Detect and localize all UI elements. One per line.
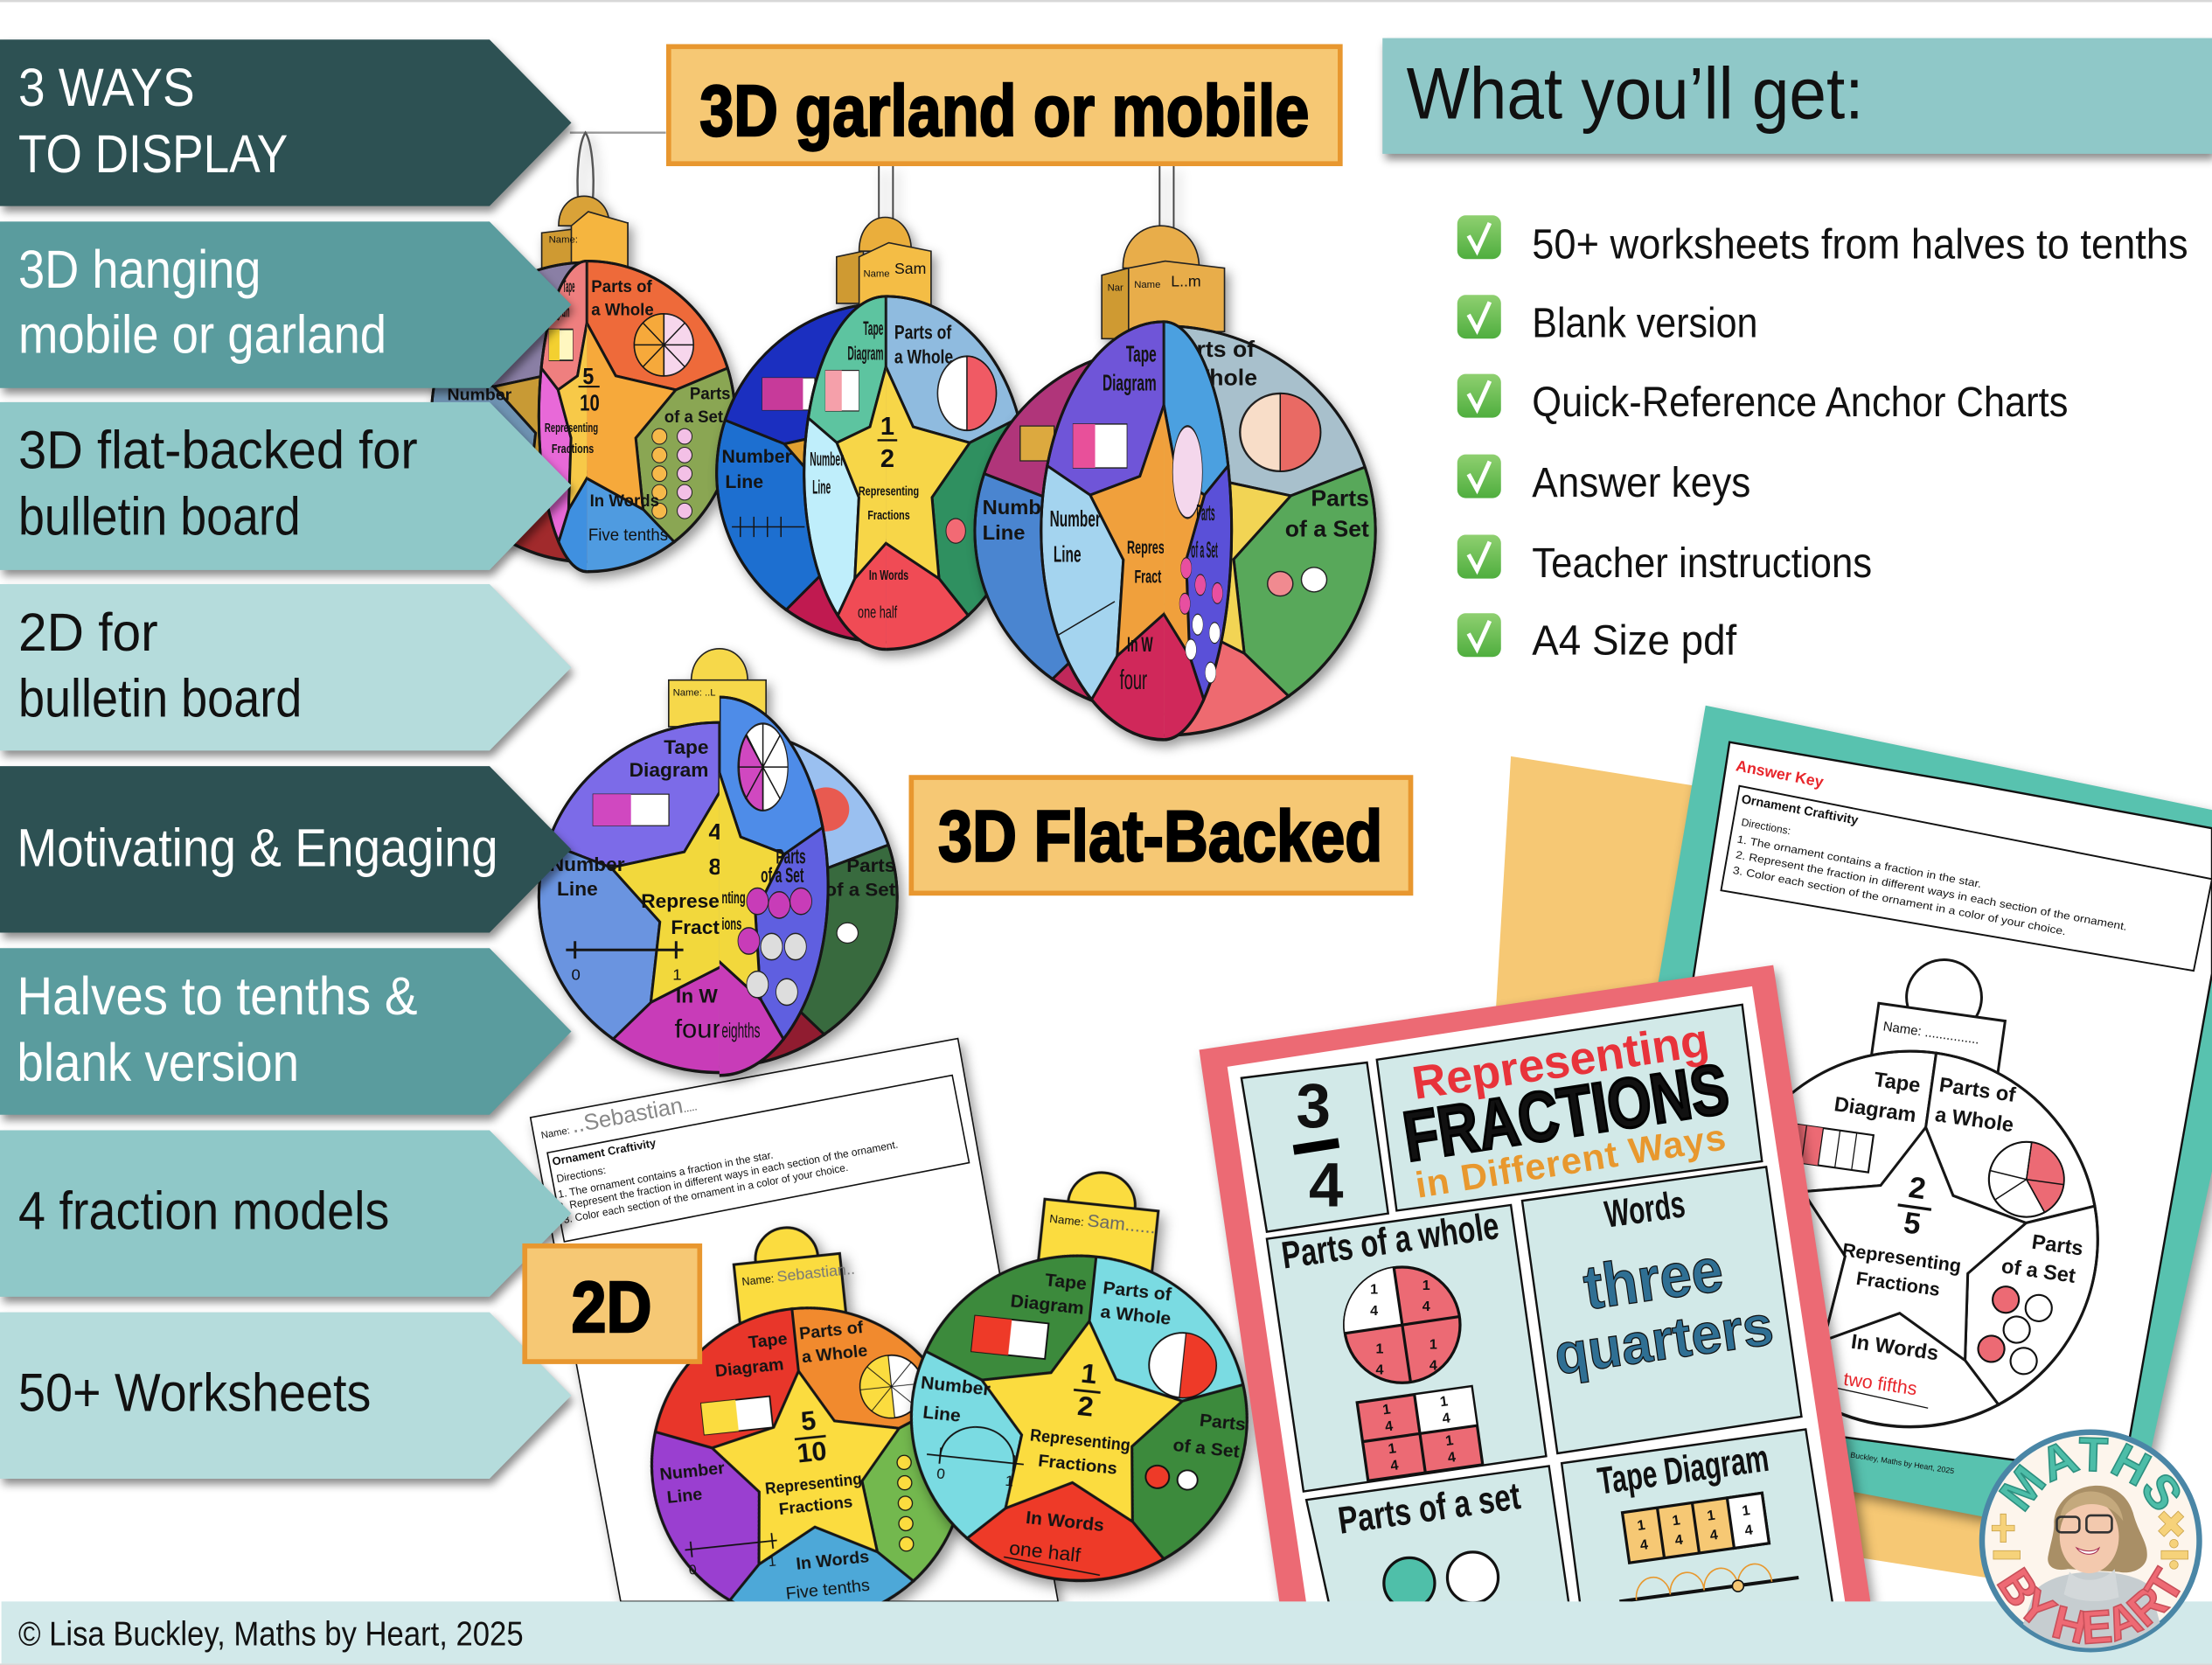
answer key ornament: Diagram <box>1833 1093 1917 1127</box>
star fraction text: one half: 2 <box>880 445 894 473</box>
flat-backed 3D ornament: four eighths: Fract <box>671 917 720 938</box>
hanging 3D ornament: one half: Tape <box>863 317 884 339</box>
star fraction text: one half: In Words <box>869 568 908 583</box>
arrow: halves to tenths and blank version: blank version <box>17 1032 299 1092</box>
arrow: motivating and engaging <box>0 766 571 933</box>
arrow: 50+ worksheets: 50+ Worksheets <box>18 1362 371 1423</box>
hanging 3D ornament: five tenths: Five tenths <box>588 526 668 545</box>
flat-backed 3D ornament: four eighths: 0 <box>572 965 581 983</box>
heading bar: what you'll get <box>1382 38 2212 154</box>
2D ornament: one half <box>895 1155 1272 1598</box>
footer bar <box>0 1601 2212 1665</box>
check item: answer keys <box>1457 455 1750 506</box>
worksheet directions box <box>547 1076 969 1242</box>
label: 3D garland or mobile: 3D garland or mobile <box>699 72 1309 151</box>
answer key directions box: 2. Represent the fraction in different ways in each section of the ornament. <box>1735 848 2128 933</box>
arrow: 3 ways to display: TO DISPLAY <box>18 123 288 184</box>
label: 2D <box>525 1246 699 1362</box>
hanging 3D ornament: one half: a Whole <box>894 347 953 368</box>
parts of a whole panel: 4 <box>1422 1299 1430 1314</box>
parts of a whole panel: 1 <box>1439 1393 1449 1410</box>
2D ornament: five tenths: Name: Sebastian.. <box>741 1260 856 1289</box>
arrow: 3D flat-backed for bulletin board: bulletin board <box>18 486 301 547</box>
hanging 3D ornament: four eighths: Nar <box>1108 282 1123 293</box>
worksheet directions box: 3. Color each section of the ornament in a color of your choice. <box>562 1161 849 1226</box>
2D ornament: one half: 0 <box>936 1466 946 1482</box>
parts of a whole panel: 1 <box>1388 1440 1397 1457</box>
hanging 3D ornament: four eighths: Line <box>1054 541 1082 568</box>
check item: answer keys: Answer keys <box>1532 459 1750 506</box>
worksheet directions box: 1. The ornament contains a fraction in the star. <box>557 1149 774 1201</box>
flat-backed 3D ornament: four eighths: 1 <box>672 965 682 983</box>
arrow: 50+ worksheets <box>0 1313 571 1479</box>
2D worksheet page <box>531 1039 1058 1601</box>
logo: Maths by Heart <box>1979 1429 2202 1653</box>
hanging 3D ornament: four eighths: Number <box>983 496 1061 519</box>
hanging 3D ornament: five tenths: Parts <box>690 385 731 404</box>
title panel: FRACTIONS <box>1398 1049 1734 1177</box>
arrow: 3D flat-backed for bulletin board <box>0 402 571 570</box>
check item: blank version <box>1457 295 1757 347</box>
flat-backed 3D ornament: four eighths: In W <box>676 986 719 1007</box>
2D ornament: one half: Number <box>920 1373 991 1400</box>
flat-backed 3D ornament: four eighths: Parts <box>776 846 806 868</box>
parts of a whole panel: 1 <box>1429 1337 1437 1353</box>
hanging 3D ornament: one half: Number <box>810 448 844 470</box>
check item: anchor charts: Quick-Reference Anchor Charts <box>1532 379 2068 426</box>
2D ornament: five tenths: Line <box>666 1485 703 1508</box>
hanging 3D ornament: four eighths: Line <box>983 522 1025 544</box>
2D ornament: five tenths: Tape <box>748 1329 789 1352</box>
hanging 3D ornament: four eighths: In W <box>1127 633 1153 657</box>
parts of a whole panel: Parts of a whole <box>1279 1205 1501 1277</box>
hanging 3D ornament: one half: Number <box>721 446 792 467</box>
arrow: 3D flat-backed for bulletin board: 3D flat-backed for <box>18 420 418 480</box>
parts of a whole panel: 1 <box>1381 1401 1392 1418</box>
tape diagram panel: 1 <box>1671 1512 1681 1529</box>
arrow: 3 ways to display <box>0 39 571 206</box>
arrow: halves to tenths and blank version: Halves to tenths & <box>17 965 418 1026</box>
flat-backed 3D ornament: four eighths: 4 <box>709 819 722 845</box>
hanging 3D ornament: four eighths: Parts <box>1311 485 1369 512</box>
fraction panel: 4 <box>1309 1152 1344 1221</box>
hanging 3D ornament: one half: Line <box>725 471 763 492</box>
hanging 3D ornament: four eighths: Tape <box>1126 341 1157 366</box>
star fraction text: five tenths: 5 <box>582 365 594 389</box>
arrow: 2D for bulletin board: bulletin board <box>18 668 302 728</box>
hanging 3D ornament: four eighths: of a Set <box>1285 516 1369 542</box>
logo: Maths by Heart: MATHS <box>1999 1437 2181 1513</box>
flat-backed 3D ornament: four eighths: eighths <box>721 1019 760 1042</box>
flat-backed 3D ornament: four eighths: Number <box>550 854 625 875</box>
answer key ornament: Name: ............... <box>1882 1019 1980 1048</box>
check item: A4 size pdf <box>1457 613 1737 665</box>
fraction panel: 3 <box>1296 1072 1331 1141</box>
hanging 3D ornament: four eighths: Name <box>1134 280 1160 290</box>
arrow: motivating and engaging: Motivating & Engaging <box>17 818 498 878</box>
2D ornament: five tenths: Fractions <box>778 1493 853 1518</box>
star fraction text: five tenths: 10 <box>580 392 600 416</box>
flat-backed 3D ornament: four eighths: Represe <box>641 891 720 912</box>
answer key ornament: In Words <box>1850 1331 1940 1365</box>
check item: teacher instructions: Teacher instructions <box>1532 540 1872 587</box>
checklist <box>1457 215 2188 665</box>
parts of a whole panel <box>1267 1205 1546 1492</box>
check item: blank version: Blank version <box>1532 300 1757 347</box>
answer key ornament: two fifths <box>1842 1369 1918 1399</box>
answer key directions box: Ornament Craftivity <box>1740 792 1860 828</box>
flat-backed 3D ornament: four eighths: of a Set <box>761 864 804 888</box>
answer key ornament <box>1698 934 2135 1452</box>
parts of a whole panel: 4 <box>1389 1457 1400 1473</box>
flat-backed 3D ornament: four eighths: ions <box>721 916 741 934</box>
flat-backed 3D ornament: four eighths: 8 <box>709 854 721 880</box>
check item: A4 size pdf: A4 Size pdf <box>1532 617 1737 665</box>
2D ornament: one half: Fractions <box>1037 1452 1118 1479</box>
hanging 3D ornament: one half <box>717 165 1055 650</box>
parts of a whole panel: 1 <box>1444 1432 1454 1449</box>
answer key directions box: Directions: <box>1741 816 1791 837</box>
tape diagram panel: 1 <box>1741 1502 1751 1519</box>
title panel: in Different Ways <box>1413 1116 1729 1206</box>
check item: teacher instructions <box>1457 535 1872 587</box>
flat-backed 3D ornament: four eighths: of a Set <box>824 879 895 900</box>
answer key heading: Answer Key <box>1735 756 1825 791</box>
hanging 3D ornament: five tenths: In Words <box>590 492 659 511</box>
flat-backed 3D ornament: four eighths: Line <box>557 879 598 900</box>
2D ornament: five tenths: 10 <box>796 1436 828 1468</box>
star fraction text: five tenths: Representing <box>545 421 598 435</box>
parts of a whole panel: 1 <box>1370 1282 1378 1298</box>
parts of a whole panel: 4 <box>1376 1362 1384 1378</box>
title panel: Representing <box>1409 1014 1712 1110</box>
2D ornament: one half: 1 <box>1005 1473 1014 1489</box>
parts of a whole panel: 4 <box>1441 1410 1451 1426</box>
2D ornament: five tenths: 5 <box>800 1405 817 1437</box>
star fraction text: one half: one half <box>858 603 898 623</box>
parts of a whole panel: 4 <box>1447 1449 1457 1466</box>
answer key ornament: Tape <box>1873 1069 1922 1097</box>
arrow: 3D hanging mobile or garland <box>0 221 571 388</box>
tape diagram panel: Tape Diagram <box>1595 1438 1771 1503</box>
hanging 3D ornament: four eighths: Number <box>1050 506 1101 532</box>
tape diagram panel: 4 <box>1639 1536 1649 1553</box>
answer key ornament: Fractions <box>1854 1268 1941 1300</box>
answer key directions box <box>1721 786 2212 971</box>
flat-backed 3D ornament: four eighths <box>539 649 900 1076</box>
2D ornament: five tenths: Five tenths <box>785 1576 871 1604</box>
label: 3D flat-backed <box>911 777 1411 893</box>
2D ornament: five tenths <box>628 1211 980 1637</box>
2D ornament: one half: one half <box>1008 1536 1082 1566</box>
2D ornament: one half: a Whole <box>1100 1302 1172 1329</box>
hanging 3D ornament: one half: Parts of <box>894 322 952 344</box>
words panel: quarters <box>1550 1293 1777 1386</box>
arrow: 2D for bulletin board: 2D for <box>18 602 158 662</box>
hanging 3D ornament: five tenths: Name: <box>549 235 578 246</box>
2D ornament: five tenths: Number <box>659 1459 726 1485</box>
2D ornament: one half: Diagram <box>1010 1291 1085 1319</box>
answer key ornament: of a Set <box>2000 1255 2077 1288</box>
logo: Maths by Heart: BY HEART <box>1997 1564 2181 1644</box>
hanging 3D ornament: four eighths: Diagram <box>1103 371 1157 396</box>
star fraction text: one half: 1 <box>880 413 894 441</box>
words panel: Words <box>1603 1183 1687 1237</box>
title panel <box>1377 1005 1762 1210</box>
hanging 3D ornament: five tenths <box>432 133 742 572</box>
2D ornament: one half: 2 <box>1076 1390 1095 1422</box>
2D ornament: one half: Name: Sam...... <box>1048 1207 1157 1237</box>
star fraction text: one half <box>858 413 919 623</box>
2D ornament: five tenths: Representing <box>764 1469 863 1498</box>
answer key ornament: 2 <box>1907 1171 1928 1206</box>
hanging 3D ornament: one half: Line <box>812 476 831 498</box>
answer key copyright: Lisa Buckley, Maths by Heart, 2025 <box>1833 1448 1955 1475</box>
label: 2D: 2D <box>571 1268 651 1348</box>
2D ornament: one half: Representing <box>1029 1426 1131 1455</box>
hanging 3D ornament: four eighths: Fract <box>1134 566 1161 587</box>
answer key directions box: 3. Color each section of the ornament in a color of your choice. <box>1732 864 2067 937</box>
hanging 3D ornament: four eighths: Parts <box>1196 500 1215 526</box>
tape diagram panel: 1 <box>1636 1517 1646 1534</box>
2D ornament: one half: Tape <box>1044 1270 1088 1294</box>
parts of a whole panel: 4 <box>1370 1303 1378 1319</box>
parts of a set panel <box>1306 1466 1569 1608</box>
2D ornament: one half: Line <box>922 1403 962 1426</box>
arrow: 2D for bulletin board <box>0 584 571 750</box>
star fraction text: five tenths <box>545 365 600 456</box>
hanging 3D ornament: five tenths: Parts of <box>591 278 652 296</box>
coral anchor chart poster <box>1199 965 1871 1608</box>
flat-backed 3D ornament: four eighths: nting <box>721 889 746 908</box>
2D ornament: one half: In Words <box>1025 1508 1105 1536</box>
arrow: halves to tenths and blank version <box>0 948 571 1115</box>
flat-backed 3D ornament: four eighths: Name: ..L <box>673 687 716 698</box>
hanging 3D ornament: four eighths: of a Set <box>1191 538 1218 563</box>
star fraction text: five tenths: Fractions <box>552 442 594 456</box>
hanging 3D ornament: five tenths: Number <box>447 387 512 404</box>
arrow: 3D hanging mobile or garland: mobile or garland <box>18 303 386 364</box>
parts of a whole panel: 4 <box>1384 1418 1394 1435</box>
answer key ornament: Parts <box>2030 1231 2084 1261</box>
tape diagram panel <box>1562 1430 1833 1603</box>
hanging 3D ornament: four eighths: Repres <box>1127 536 1165 558</box>
answer key ornament: Representing <box>1841 1239 1963 1277</box>
hanging 3D ornament: four eighths: L..m <box>1171 273 1201 290</box>
2D ornament: one half: of a Set <box>1172 1435 1241 1462</box>
answer key ornament: 5 <box>1902 1206 1923 1242</box>
2D ornament: five tenths: a Whole <box>801 1341 868 1367</box>
2D ornament: one half: Parts of <box>1102 1278 1172 1305</box>
hanging 3D ornament: five tenths: a Whole <box>591 301 654 320</box>
2D ornament: one half: Parts <box>1199 1411 1247 1435</box>
hanging 3D ornament: one half: Name <box>863 268 890 279</box>
footer bar: © Lisa Buckley, Maths by Heart, 2025 <box>18 1615 524 1653</box>
2D ornament: five tenths: Diagram <box>714 1355 784 1381</box>
flat-backed 3D ornament: four eighths: Parts <box>846 855 895 876</box>
worksheet name line: Name: ..Sebastian..... <box>539 1090 699 1144</box>
2D ornament: five tenths: 0 <box>688 1562 698 1578</box>
arrow: 4 fraction models <box>0 1130 571 1297</box>
answer key directions box: 1. The ornament contains a fraction in the star. <box>1736 832 1982 890</box>
parts of a whole panel: 4 <box>1429 1358 1437 1374</box>
arrow: 3 ways to display: 3 WAYS <box>18 57 195 117</box>
hanging 3D ornament: one half: Sam <box>894 260 926 277</box>
star fraction text: one half: Fractions <box>867 509 910 523</box>
tape diagram panel: 1 <box>1706 1508 1716 1524</box>
hanging 3D ornament: four eighths: four <box>1120 665 1147 696</box>
hanging 3D ornament: five tenths: Diagram <box>548 303 569 322</box>
fraction panel <box>1242 1062 1388 1232</box>
answer key ornament: a Whole <box>1933 1104 2015 1137</box>
2D ornament: one half: 1 <box>1080 1357 1098 1390</box>
arrow: 3D hanging mobile or garland: 3D hanging <box>18 239 261 299</box>
heading bar: what you'll get: What you’ll get: <box>1407 52 1863 135</box>
flat-backed 3D ornament: four eighths: Diagram <box>630 759 709 781</box>
hanging 3D ornament: four eighths: a Whole <box>1168 365 1257 390</box>
orange backing sheet <box>1467 756 2074 1580</box>
tape diagram panel: 4 <box>1743 1522 1754 1539</box>
hanging 3D ornament: one half: Diagram <box>847 342 883 365</box>
parts of a whole panel: 1 <box>1376 1341 1384 1356</box>
teal answer key page <box>1580 706 2212 1545</box>
tape diagram panel: 4 <box>1709 1527 1719 1543</box>
parts of a set panel: Parts of a set <box>1336 1475 1523 1543</box>
words panel: three <box>1579 1236 1728 1323</box>
2D ornament: five tenths: 1 <box>768 1553 777 1570</box>
flat-backed 3D ornament: four eighths: Tape <box>664 736 709 758</box>
connector line from arrow to garland label <box>570 132 666 134</box>
label: 3D flat-backed: 3D Flat-Backed <box>938 797 1382 876</box>
parts of a whole panel: 1 <box>1422 1278 1430 1293</box>
hanging 3D ornament: five tenths: Tape <box>563 278 574 296</box>
words panel <box>1522 1167 1801 1453</box>
worksheet directions box: 2. Represent the fraction in different ways in each section of the ornament. <box>557 1139 899 1213</box>
label: 3D garland or mobile <box>669 46 1340 164</box>
hanging 3D ornament: four eighths <box>952 165 1375 740</box>
flat-backed 3D ornament: four eighths: four <box>674 1014 721 1043</box>
worksheet directions box: Ornament Craftivity <box>551 1136 657 1168</box>
tape diagram panel: 4 <box>1674 1532 1684 1549</box>
hanging 3D ornament: five tenths: of a Set <box>664 408 724 427</box>
2D ornament: five tenths: Parts of <box>798 1318 865 1344</box>
worksheet directions box: Directions: <box>555 1164 607 1185</box>
star fraction text: one half: Representing <box>859 484 919 498</box>
answer key ornament: Parts of <box>1937 1074 2017 1107</box>
hanging 3D ornament: four eighths: Parts of <box>1168 336 1255 362</box>
arrow: 4 fraction models: 4 fraction models <box>18 1180 389 1240</box>
2D ornament: five tenths: In Words <box>795 1547 870 1574</box>
